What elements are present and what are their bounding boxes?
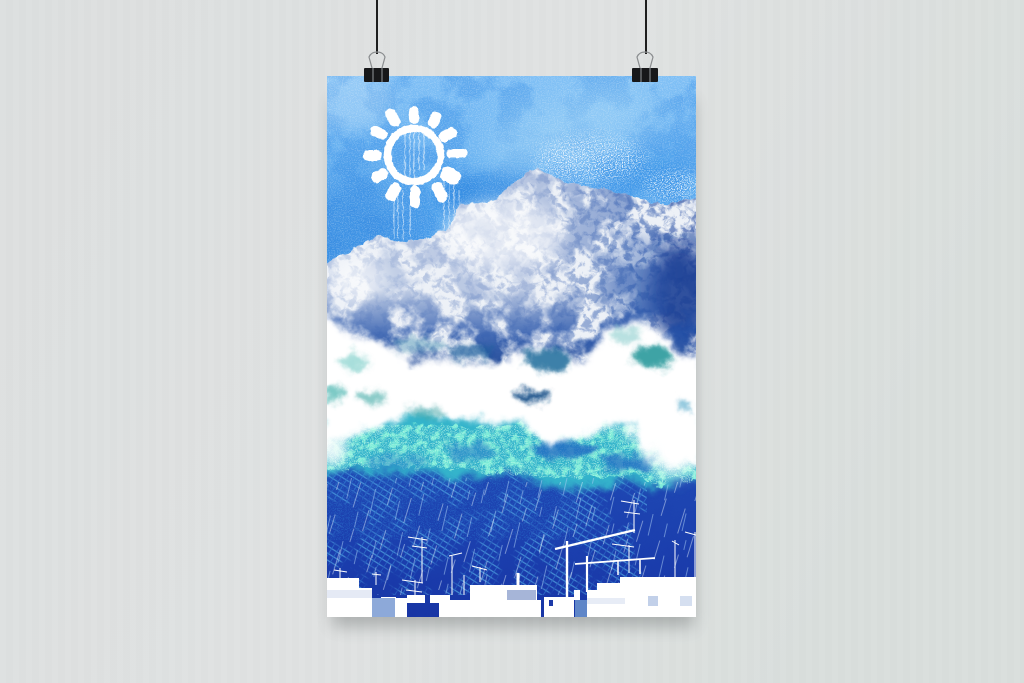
bright central face xyxy=(445,200,565,270)
mountain xyxy=(320,167,712,370)
roof details xyxy=(327,590,692,617)
binder clip right xyxy=(632,52,658,82)
antennas xyxy=(334,500,696,600)
white spray near the summit xyxy=(537,138,700,200)
clouds xyxy=(315,310,705,476)
sun rays xyxy=(363,106,468,208)
paint drips xyxy=(394,126,459,240)
sun ring xyxy=(388,128,440,182)
poster drop shadow xyxy=(332,100,694,627)
light spill at the edges xyxy=(648,424,696,476)
cross hatching xyxy=(327,470,647,595)
binder clip left xyxy=(364,52,389,82)
crane one xyxy=(555,530,635,598)
rooftop antennas and cranes xyxy=(334,500,696,600)
cloud shadows xyxy=(321,327,694,418)
dark right flank xyxy=(648,244,712,340)
crane two xyxy=(575,556,655,592)
sun icon xyxy=(363,106,468,240)
rain storm band xyxy=(327,458,696,617)
poster mock-up scene xyxy=(322,0,705,640)
white rooftops xyxy=(327,577,696,617)
shadowed ragged base of the mountain xyxy=(327,290,696,370)
poster xyxy=(327,76,696,617)
rain streaks xyxy=(327,478,696,595)
sky xyxy=(327,76,696,264)
teal band xyxy=(315,415,710,488)
hanging wires xyxy=(376,0,647,54)
